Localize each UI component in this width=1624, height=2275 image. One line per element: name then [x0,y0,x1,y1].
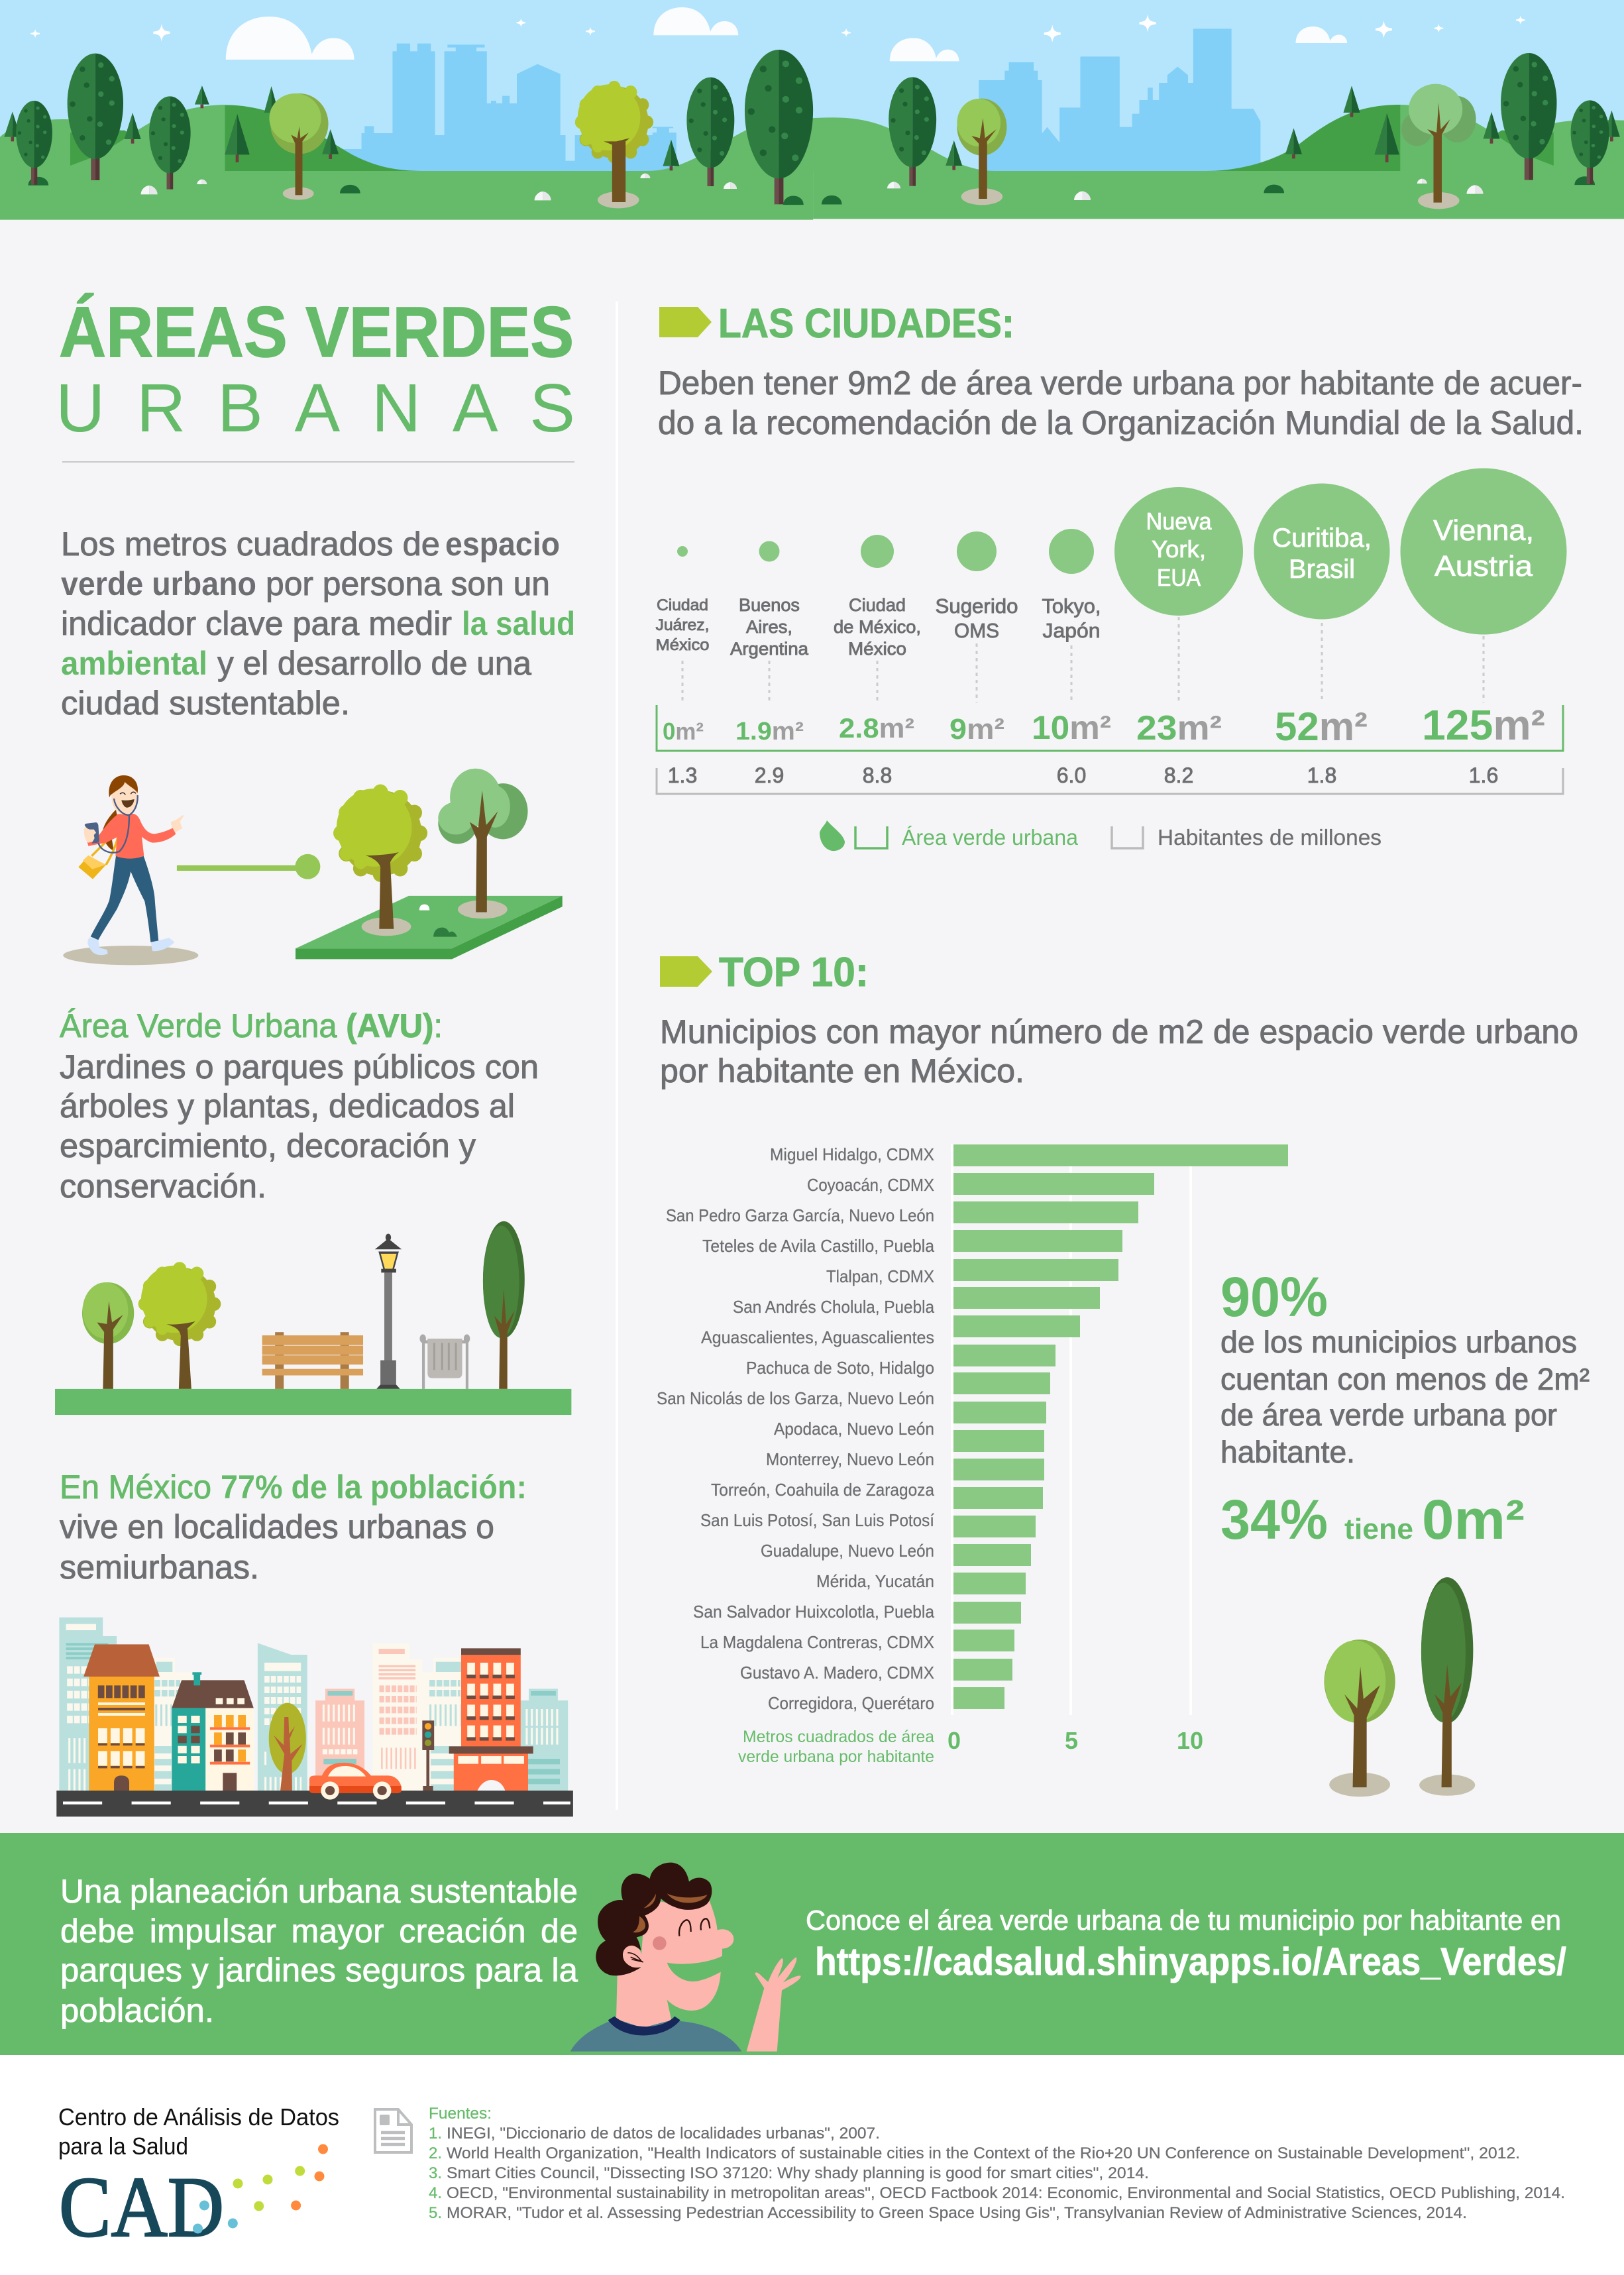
band left text: debe impulsar mayor creación de [60,1913,578,1950]
population values: 1.3 [668,763,697,787]
hills [0,105,1624,171]
bubble labels below: Japón [1043,619,1100,642]
m2 values: 23m² [1136,709,1222,748]
car [309,1763,402,1800]
statistic: 34 percent: 34% [1220,1488,1328,1551]
sources: 2. [429,2144,442,2162]
population values: 8.8 [863,763,892,787]
m2 values: 2.8m² [839,712,914,744]
statistic: 90 percent [1220,1266,1590,1469]
section heading: top 10: TOP 10: [719,950,869,995]
sources: MORAR, "Tudor et al. Assessing Pedestrian Accessibility to Green Space Using Gis", Transylvanian Review of Administrative Sciences, 2014. [447,2204,1467,2222]
statistic: 34 percent [1220,1488,1525,1551]
small conifers [4,85,1620,170]
illustration: woman walking [63,775,198,965]
yellow green tree center [575,81,653,208]
axis: Metros cuadrados de área [743,1728,934,1746]
bubble chart: cities [656,468,1566,794]
title [56,292,575,446]
bubble labels inside: Vienna, [1433,514,1534,547]
band left text: parques y jardines seguros para la [60,1952,578,1989]
m2 values: 125m² [1422,701,1545,749]
bubble labels below: OMS [954,619,999,642]
bubble labels below: Buenos [739,595,800,615]
bar labels: Miguel Hidalgo, CDMX [770,1144,934,1164]
axis: 5 [1065,1727,1078,1754]
sources: OECD, "Environmental sustainability in metropolitan areas", OECD Factbook 2014: Economic, Environmental and Social Statistics, OECD Publishing, 2014. [447,2184,1565,2202]
statistic: 90 percent: habitante. [1220,1435,1355,1469]
sources: 3. [429,2164,442,2182]
bubble labels below: Aires, [746,617,792,637]
intro paragraph: ciudad sustentable. [61,685,350,722]
bar labels: Mérida, Yucatán [816,1571,934,1591]
cypress trees [16,50,1609,204]
definition: área verde urbana: árboles y plantas, dedicados al [60,1087,515,1125]
bubble labels below: Ciudad [849,595,906,615]
las ciudades description [658,364,1584,441]
statistic: 90 percent: cuentan con menos de 2m² [1220,1362,1590,1396]
bar labels: San Nicolás de los Garza, Nuevo León [657,1388,934,1408]
header illustration: park skyline [0,0,1624,220]
bubble labels below: México [656,636,709,654]
stars [30,15,1525,42]
bar labels: Apodaca, Nuevo León [774,1419,934,1439]
definition: área verde urbana [60,1007,539,1205]
definition: área verde urbana: conservación. [60,1168,266,1205]
m2 values: 1.9m² [735,718,804,746]
white stones and bushes [28,174,1595,205]
logo: centro de análisis de datos: para la Salud [58,2133,188,2160]
statistic: población urbana: semiurbanas. [60,1549,259,1586]
sources: Smart Cities Council, "Dissecting ISO 37120: Why shady planning is good for smart cities", 2014. [447,2164,1149,2182]
las ciudades description: Deben tener 9m2 de área verde urbana por habitante de acuer- [658,364,1582,402]
logo: centro de análisis de datos: Centro de Análisis de Datos [58,2103,339,2131]
top 10 description: por habitante en México. [660,1052,1024,1089]
bubble labels below: Juárez, [656,616,709,634]
intro paragraph: espacio [445,526,560,563]
band left text: población. [60,1992,214,2029]
bar labels: San Salvador Huixcolotla, Puebla [693,1602,935,1622]
intro paragraph: por persona son un [266,565,550,602]
light green tree left [269,93,329,200]
statistic: población urbana [60,1469,527,1586]
green call-to-action band [0,1833,1624,2055]
band right text: Conoce el área verde urbana de tu municipio por habitante en [806,1905,1561,1936]
bubble labels inside: EUA [1157,564,1201,591]
top 10 description: Municipios con mayor número de m2 de espacio verde urbano [660,1013,1578,1050]
bubble labels below: México [848,639,906,659]
band left text: Una planeación urbana sustentable [60,1873,578,1910]
axis [738,1727,1203,1766]
bubble labels inside: Austria [1435,550,1533,583]
axis: 10 [1177,1727,1203,1754]
bar labels: La Magdalena Contreras, CDMX [700,1632,934,1652]
statistic: 90 percent: de área verde urbana por [1220,1398,1557,1432]
city silhouette [342,28,1260,172]
bar labels: San Andrés Cholula, Puebla [733,1297,934,1317]
bar labels: Corregidora, Querétaro [768,1693,934,1713]
statistic: 90 percent: de los municipios urbanos [1220,1325,1577,1359]
title: URBANAS [56,370,575,446]
band right text: https://cadsalud.shinyapps.io/Areas_Verdes/ [815,1940,1566,1983]
bubble labels inside: Nueva [1146,508,1212,535]
bubble labels below: Ciudad [657,596,708,614]
bubble labels below: Sugerido [936,594,1018,618]
sources: 4. [429,2184,442,2202]
population values: 2.9 [755,763,784,787]
illustration: city street [56,1618,573,1816]
illustration: park with trees [296,769,563,959]
sources: 1. [429,2125,442,2142]
bubble labels below: Tokyo, [1042,594,1101,618]
section heading: las ciudades: LAS CIUDADES: [718,301,1014,347]
axis: 0 [947,1727,961,1754]
intro paragraph: Los metros cuadrados de [61,526,440,563]
bar labels: Guadalupe, Nuevo León [761,1541,934,1561]
bubble labels below: Argentina [730,639,809,659]
population values: 1.6 [1469,763,1498,787]
statistic: población urbana: En México [60,1469,211,1506]
bar labels: Aguascalientes, Aguascalientes [701,1327,934,1347]
vertical divider [616,302,618,1810]
m2 values: 52m² [1275,704,1368,749]
intro paragraph: indicador clave para medir [61,605,452,642]
bar labels: Tlalpan, CDMX [826,1266,934,1286]
m2 values: 10m² [1032,709,1111,746]
intro paragraph: ambiental [61,645,207,682]
intro paragraph [61,526,575,722]
definition: área verde urbana: Jardines o parques públicos con [60,1048,539,1085]
bar labels: Monterrey, Nuevo León [766,1449,934,1469]
ground [0,171,1624,220]
statistic: 34 percent: tiene [1344,1513,1413,1545]
axis: verde urbana por habitante [738,1748,934,1766]
bar labels: Pachuca de Soto, Hidalgo [746,1358,934,1378]
bubble labels below: de México, [834,617,921,637]
illustration: park furniture [55,1221,571,1415]
intro paragraph: la salud [462,605,575,642]
bar labels: San Pedro Garza García, Nuevo León [666,1205,934,1225]
bubble labels inside: Brasil [1289,555,1355,584]
m2 values: 0m² [663,718,704,745]
legend: Habitantes de millones [1158,825,1381,850]
las ciudades description: do a la recomendación de la Organización Mundial de la Salud. [658,404,1584,441]
sources: INEGI, "Diccionario de datos de localidades urbanas", 2007. [447,2125,880,2142]
m2 values: 9m² [949,713,1004,746]
clouds [226,7,1347,61]
sources: 5. [429,2204,442,2222]
double tree right [1401,84,1476,209]
connector line [177,854,320,879]
statistic: población urbana: vive en localidades urbanas o [60,1508,494,1545]
legend: Área verde urbana [902,825,1079,850]
sources [429,2105,1565,2222]
definition: área verde urbana: Área Verde Urbana (AVU): [60,1007,443,1044]
bar labels: Coyoacán, CDMX [807,1175,934,1195]
logo: centro de análisis de datos [58,2103,339,2255]
definition: área verde urbana: esparcimiento, decoración y [60,1127,476,1164]
bar labels: Torreón, Coahuila de Zaragoza [711,1480,934,1500]
statistic: población urbana: 77% de la población: [221,1469,527,1506]
bubble labels inside: Curitiba, [1272,524,1372,553]
population values: 6.0 [1057,763,1086,787]
bubble labels inside: York, [1152,535,1206,563]
light green tree center right [957,99,1006,205]
legend [820,820,1381,851]
bubble labels inside [1146,508,1534,591]
population values [668,763,1498,787]
bar chart: municipalities [657,1144,1288,1766]
m2 values [663,701,1545,749]
intro paragraph: y el desarrollo de una [217,645,531,682]
bar labels: Teteles de Avila Castillo, Puebla [702,1236,935,1256]
sources: Fuentes: [429,2105,492,2123]
top 10 description [660,1013,1578,1089]
logo: centro de análisis de datos: CAD [59,2160,224,2255]
band right text [806,1905,1566,1983]
population values: 8.2 [1164,763,1193,787]
statistic: 90 percent: 90% [1220,1266,1328,1328]
icon: document [375,2109,411,2152]
band left text [60,1873,578,2029]
bar labels: San Luis Potosí, San Luis Potosí [700,1510,935,1530]
illustration: two trees [1325,1577,1475,1797]
sources: World Health Organization, "Health Indicators of sustainable cities in the Context of the Rio+20 UN Conference on Sustainable Development", 2012. [447,2144,1520,2162]
population values: 1.8 [1307,763,1336,787]
title: ÁREAS VERDES [59,292,574,372]
bar labels [657,1144,935,1713]
illustration: smiling man [570,1863,800,2052]
bubble labels below [656,594,1101,659]
statistic: 34 percent: 0m² [1422,1488,1525,1551]
bar labels: Gustavo A. Madero, CDMX [740,1663,934,1683]
intro paragraph: verde urbano [61,565,256,602]
footer [0,2055,1624,2275]
